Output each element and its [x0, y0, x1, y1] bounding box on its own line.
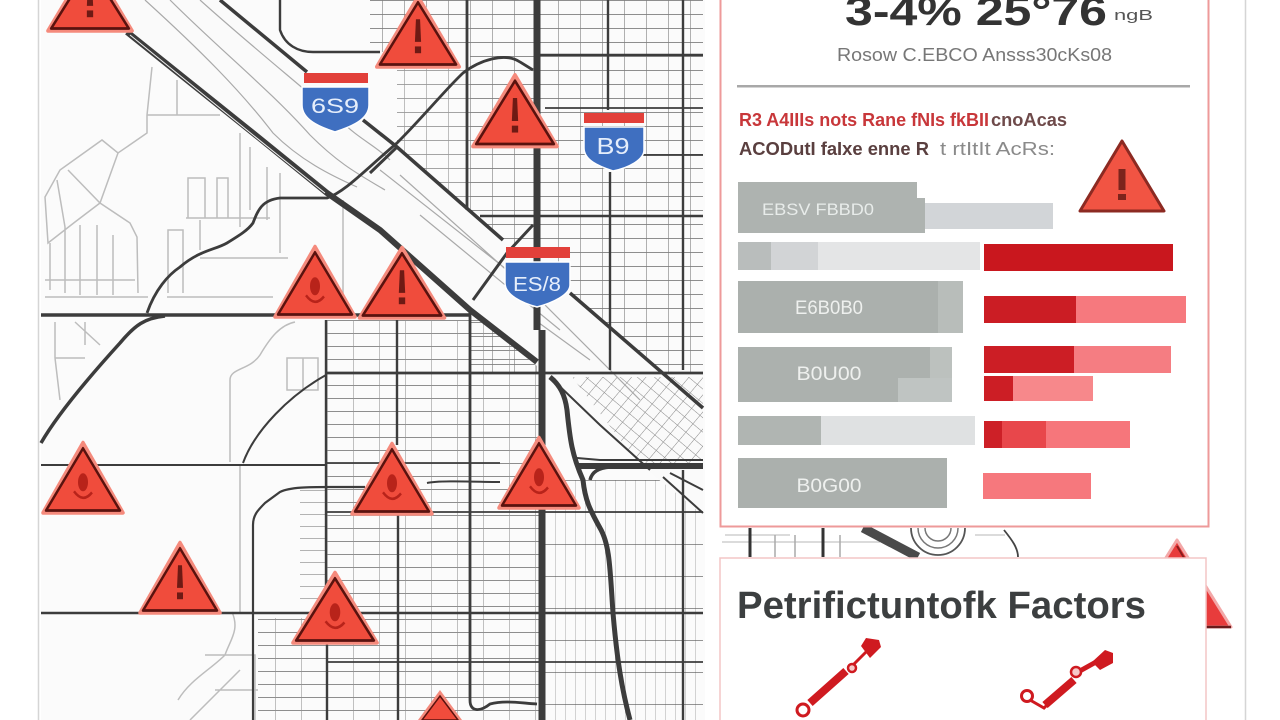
main roads: [41, 0, 703, 720]
hazard: bottom left: [140, 543, 220, 613]
row 5: [738, 416, 1130, 448]
hazard: bottom edge: [418, 690, 462, 720]
interstate shield: center: [505, 247, 570, 307]
map: [41, 0, 705, 720]
row 1: EBSV FBBD0: [762, 200, 874, 219]
hazard: mid left: [275, 247, 355, 317]
hazard: top center: [377, 0, 459, 67]
icon: red tool right: [1022, 650, 1113, 708]
interstate shield: center: ES/8: [513, 274, 561, 296]
red subheading: R3 A4IIIs nots Rane fNIs fkBII: [739, 110, 989, 130]
interstate shield: top right: [584, 113, 644, 171]
dark subheading: ACODutI faIxe enne R: [739, 139, 929, 159]
sparse outlying streets: [45, 67, 343, 720]
row 4: [738, 346, 1171, 402]
panel: statistics: [720, 0, 1208, 526]
icon: warning triangle: [1080, 141, 1164, 211]
hazard: lower far left: [43, 443, 123, 513]
comparison bars: [738, 182, 1186, 508]
row 3: [738, 281, 1186, 333]
row 1: [738, 182, 1053, 233]
panel: statistics: t rtItIt AcRs:: [940, 139, 1055, 159]
hazard: lower center: [352, 444, 432, 514]
street grid blocks: [258, 0, 703, 720]
hazard: upper center: [473, 75, 557, 146]
interstate shield: top left: [302, 73, 369, 132]
row 4: B0U00: [796, 364, 862, 385]
hazard: top left: [48, 0, 132, 31]
map fragment between panels: [720, 528, 1210, 558]
icon: red tool left: [797, 638, 881, 716]
divider: [737, 85, 1190, 88]
highway corridor: [90, 0, 703, 515]
panel heading: Petrifictuntofk Factors: [737, 585, 1146, 627]
hazard triangles on map: [43, 0, 579, 720]
statistic caption: Rosow C.EBCO Ansss30cKs08: [837, 45, 1112, 65]
panel: contributing factors: [720, 558, 1206, 720]
statistic unit: ngB: [1114, 7, 1153, 24]
row 6: [738, 458, 1091, 508]
hazard partly behind factors panel: [1123, 540, 1231, 627]
interstate shield: top right: B9: [596, 133, 630, 159]
panel: statistics: cnoAcas: [991, 110, 1067, 130]
row 2: [738, 242, 1173, 271]
row 6: B0G00: [796, 476, 862, 497]
hazard: lower right: [499, 438, 579, 508]
row 3: E6B0B0: [795, 298, 863, 319]
hazard: bottom center: [293, 573, 377, 643]
interstate shield: top left: 6S9: [311, 95, 359, 118]
hazard: mid center: [360, 248, 444, 318]
